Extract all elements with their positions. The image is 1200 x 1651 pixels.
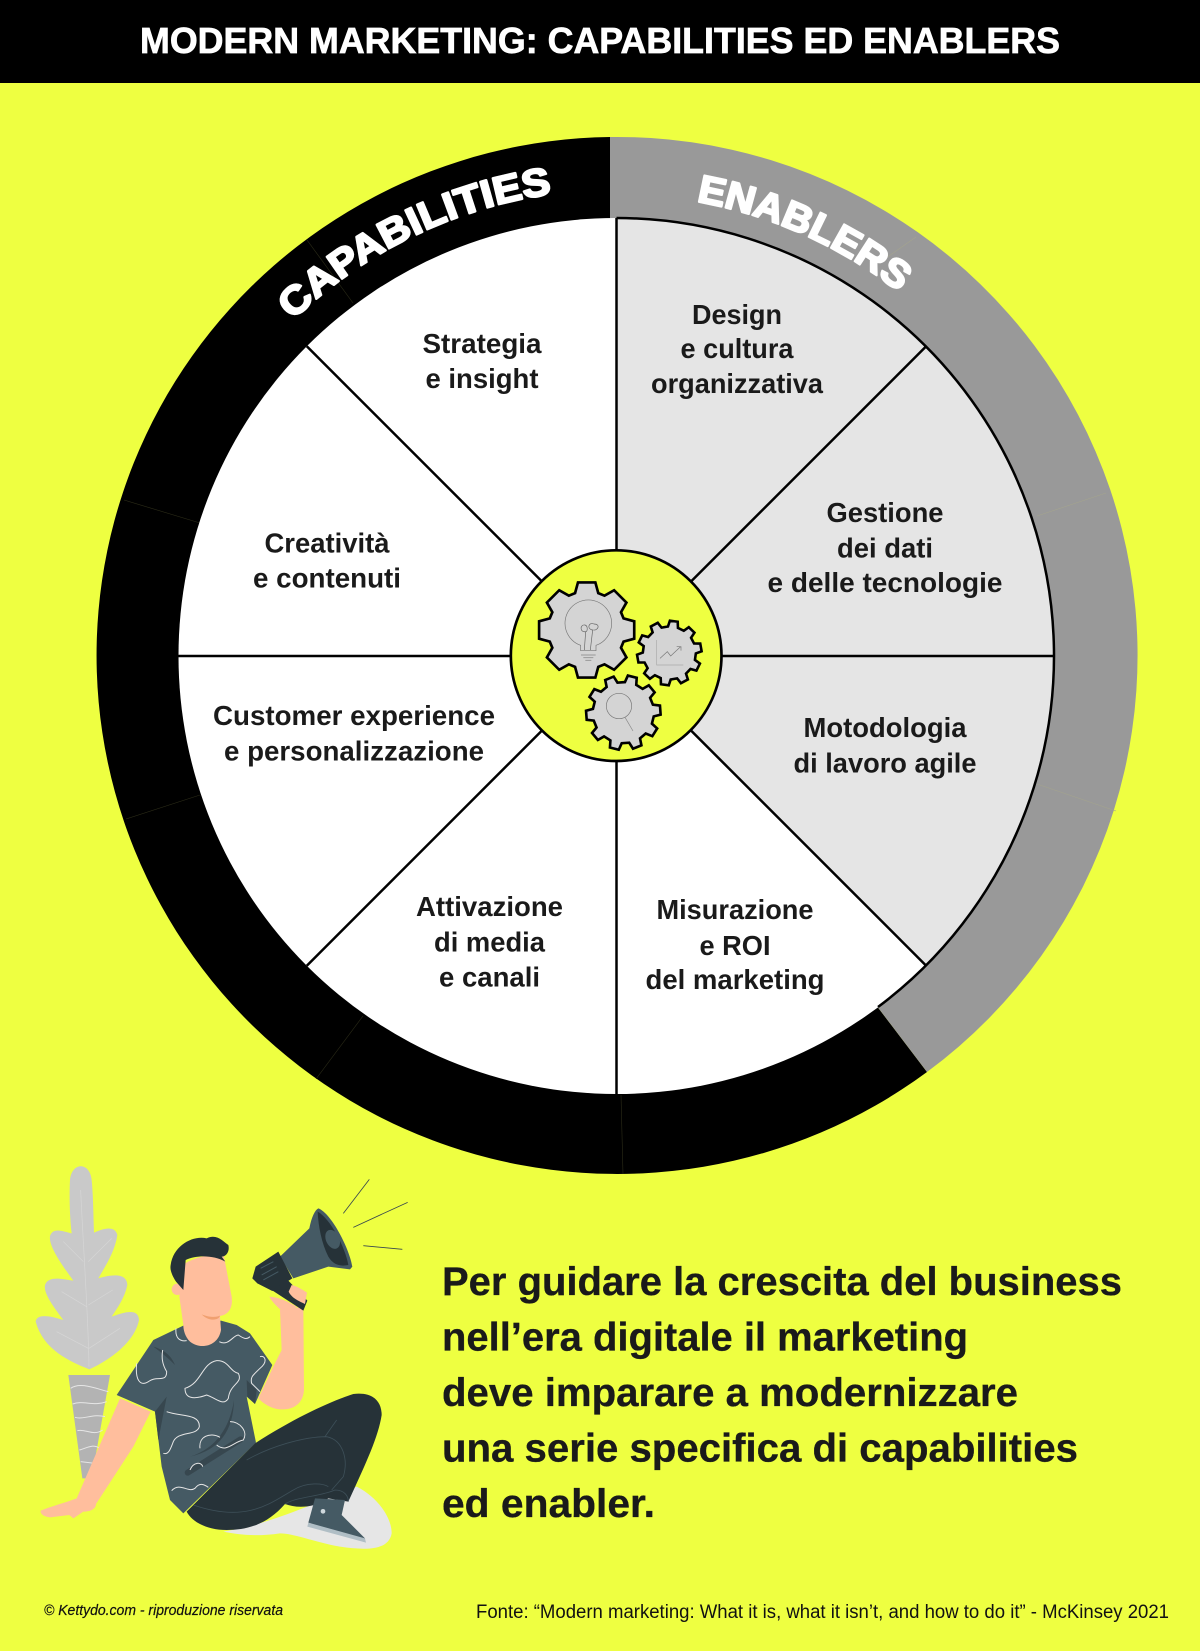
header bar with title: MODERN MARKETING: CAPABILITIES ED ENABLERS bbox=[140, 20, 1060, 61]
segment: Strategia e insight bbox=[422, 328, 542, 394]
wheel disc: capabilities segments bbox=[178, 218, 1054, 1094]
segment: Attivazione di media e canali: e canali bbox=[439, 962, 540, 992]
arc outline around enablers bbox=[616, 218, 1054, 1007]
segment: Misurazione e ROI del marketing: e ROI bbox=[700, 930, 770, 961]
center hub with gears bbox=[511, 550, 721, 761]
segment: Gestione dei dati e delle tecnologie: e delle tecnologie bbox=[768, 567, 1002, 598]
segment: Misurazione e ROI del marketing: Misurazione bbox=[656, 894, 814, 925]
segment: Design e cultura organizzativa bbox=[651, 299, 823, 399]
outer ring: capabilities (black) bbox=[97, 137, 927, 1174]
segment: Customer experience e personalizzazione: Customer experience bbox=[213, 700, 495, 731]
text block: main message: nell’era digitale il marketing bbox=[442, 1316, 968, 1360]
shirt bbox=[117, 1321, 272, 1513]
icon: gear with growth chart bbox=[633, 617, 705, 689]
right arm bbox=[258, 1307, 304, 1409]
segment: Attivazione di media e canali: di media bbox=[434, 926, 545, 958]
footer: copyright: © Kettydo.com - riproduzione riservata bbox=[44, 1602, 283, 1619]
floor shadow bbox=[223, 1487, 392, 1549]
segment: Customer experience e personalizzazione: e personalizzazione bbox=[224, 736, 484, 766]
icon: gear with light bulb bbox=[539, 582, 634, 678]
segment: Motodologia di lavoro agile bbox=[794, 712, 976, 778]
wheel diagram bbox=[96, 137, 1138, 1174]
segment: Gestione dei dati e delle tecnologie: dei dati bbox=[837, 532, 933, 564]
illustration: man with megaphone and plant bbox=[36, 1166, 408, 1549]
segment: Creatività e contenuti bbox=[253, 528, 401, 594]
wheel sectors: enablers bbox=[616, 218, 1054, 966]
plant leaf bbox=[36, 1166, 139, 1369]
trousers bbox=[187, 1394, 382, 1530]
left arm bbox=[41, 1398, 151, 1518]
segment: Strategia e insight: e insight bbox=[426, 363, 538, 394]
segment: Motodologia di lavoro agile: di lavoro agile bbox=[794, 748, 976, 778]
megaphone bbox=[252, 1208, 352, 1315]
segment: Misurazione e ROI del marketing bbox=[646, 894, 824, 995]
segment: Attivazione di media e canali: Attivazione bbox=[416, 891, 563, 922]
text block: main message: deve imparare a modernizzare bbox=[442, 1371, 1018, 1415]
text block: main message: Per guidare la crescita del business bbox=[442, 1260, 1122, 1304]
segment: Creatività e contenuti: Creatività bbox=[264, 528, 390, 558]
segment: Motodologia di lavoro agile: Motodologia bbox=[804, 712, 967, 743]
ring label: enablers: ENABLERS bbox=[698, 174, 912, 289]
text block: main message: una serie specifica di capabilities bbox=[442, 1426, 1078, 1470]
spokes bbox=[178, 218, 1054, 1094]
text block: main message bbox=[442, 1260, 1122, 1526]
segment: Gestione dei dati e delle tecnologie bbox=[768, 497, 1002, 598]
segment: Design e cultura organizzativa: Design bbox=[692, 299, 782, 330]
segment: Design e cultura organizzativa: e cultura bbox=[680, 333, 794, 364]
sound lines bbox=[343, 1179, 408, 1249]
header bar with title bbox=[0, 0, 1200, 83]
shoe bbox=[307, 1498, 366, 1543]
footer: source: Fonte: “Modern marketing: What it is, what it isn’t, and how to do it” - McKinsey 2021 bbox=[476, 1602, 1169, 1623]
outer ring: enablers (grey) bbox=[610, 137, 1138, 1072]
segment: Design e cultura organizzativa: organizzativa bbox=[651, 368, 823, 399]
text block: main message: ed enabler. bbox=[442, 1482, 655, 1526]
segment: Strategia e insight: Strategia bbox=[422, 328, 542, 359]
plant pot bbox=[68, 1375, 110, 1478]
segment: Attivazione di media e canali bbox=[416, 891, 563, 992]
ring label: capabilities: CAPABILITIES bbox=[280, 168, 550, 316]
icon: gear with magnifier bbox=[579, 668, 668, 758]
segment: Customer experience e personalizzazione bbox=[213, 700, 495, 766]
head and neck bbox=[170, 1237, 232, 1346]
segment: Misurazione e ROI del marketing: del marketing bbox=[646, 964, 824, 995]
segment: Gestione dei dati e delle tecnologie: Gestione bbox=[826, 497, 944, 528]
segment: Creatività e contenuti: e contenuti bbox=[253, 562, 401, 594]
